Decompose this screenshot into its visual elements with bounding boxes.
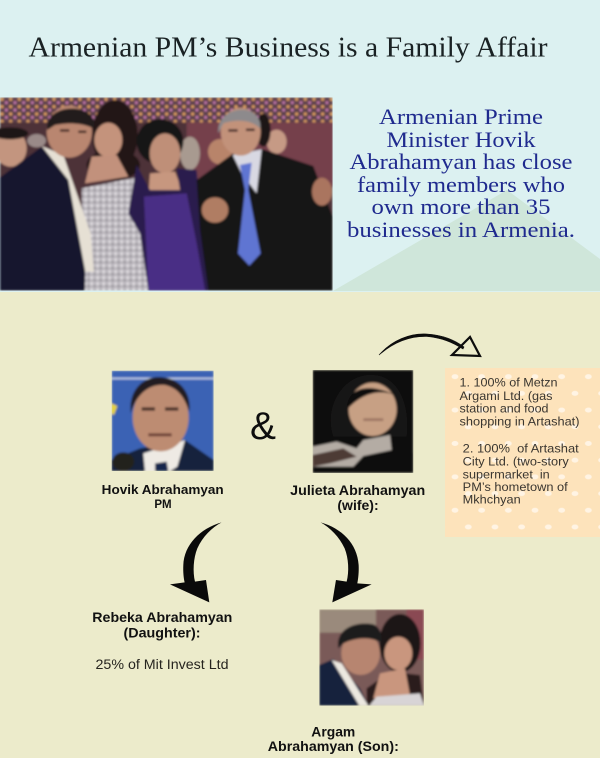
label: Julieta Abrahamyan (wife): (wife): xyxy=(337,497,379,513)
business two text: PM’s hometown of xyxy=(463,480,568,494)
label: Rebeka Abrahamyan (Daughter): (Daughter): xyxy=(124,625,200,641)
business two text: 2. 100% of Artashat xyxy=(463,442,579,456)
business one text: Argami Ltd. (gas xyxy=(460,389,552,403)
intro text block: family members who xyxy=(357,172,565,197)
business two text: City Ltd. (two-story xyxy=(463,455,570,469)
label: Hovik Abrahamyan, PM: Hovik Abrahamyan xyxy=(102,482,224,497)
intro text block: Minister Hovik xyxy=(386,127,536,152)
text: Rebeka holding: 25% of Mit Invest Ltd xyxy=(96,657,228,672)
label: Argam Abrahamyan (Son): Abrahamyan (Son): xyxy=(268,738,399,754)
business two text xyxy=(463,442,579,506)
label: Julieta Abrahamyan (wife) xyxy=(290,482,425,513)
label: Argam Abrahamyan (Son): Argam xyxy=(311,724,355,740)
business one text xyxy=(460,376,580,428)
business one text: 1. 100% of Metzn xyxy=(460,376,558,390)
intro text block xyxy=(347,104,575,242)
business one text: station and food xyxy=(460,402,549,416)
label: Hovik Abrahamyan, PM: PM xyxy=(154,499,172,511)
background: lower cream section xyxy=(0,292,600,758)
intro text block: Abrahamyan has close xyxy=(350,149,573,174)
arrow: to son xyxy=(321,522,372,602)
business two text: Mkhchyan xyxy=(463,492,521,506)
intro text block: own more than 35 xyxy=(372,194,550,219)
label: Rebeka Abrahamyan (Daughter): Rebeka Abrahamyan xyxy=(92,609,232,625)
portrait: Argam Abrahamyan xyxy=(319,609,424,706)
portrait: Julieta Abrahamyan xyxy=(313,370,413,473)
business two text: supermarket in xyxy=(463,467,550,481)
background: top teal section xyxy=(0,0,600,292)
photo: Abrahamyan family group xyxy=(0,97,333,291)
panel: Julieta's businesses xyxy=(445,368,600,537)
intro text block: Armenian Prime xyxy=(379,104,543,129)
label: Rebeka Abrahamyan (Daughter) xyxy=(92,609,232,641)
ampersand: & xyxy=(250,405,276,448)
label: Argam Abrahamyan (Son) xyxy=(268,724,399,754)
background: pale green mountain xyxy=(333,190,600,291)
arrow: to daughter xyxy=(170,522,222,602)
business one text: shopping in Artashat) xyxy=(460,414,580,428)
intro text block: businesses in Armenia. xyxy=(347,217,575,242)
arrow: Julieta to business list xyxy=(379,334,480,356)
title: Armenian PM’s Business is a Family Affair xyxy=(28,33,548,64)
label: Hovik Abrahamyan, PM xyxy=(102,482,224,511)
label: Julieta Abrahamyan (wife): Julieta Abrahamyan xyxy=(290,482,425,498)
portrait: Hovik Abrahamyan xyxy=(112,371,214,471)
